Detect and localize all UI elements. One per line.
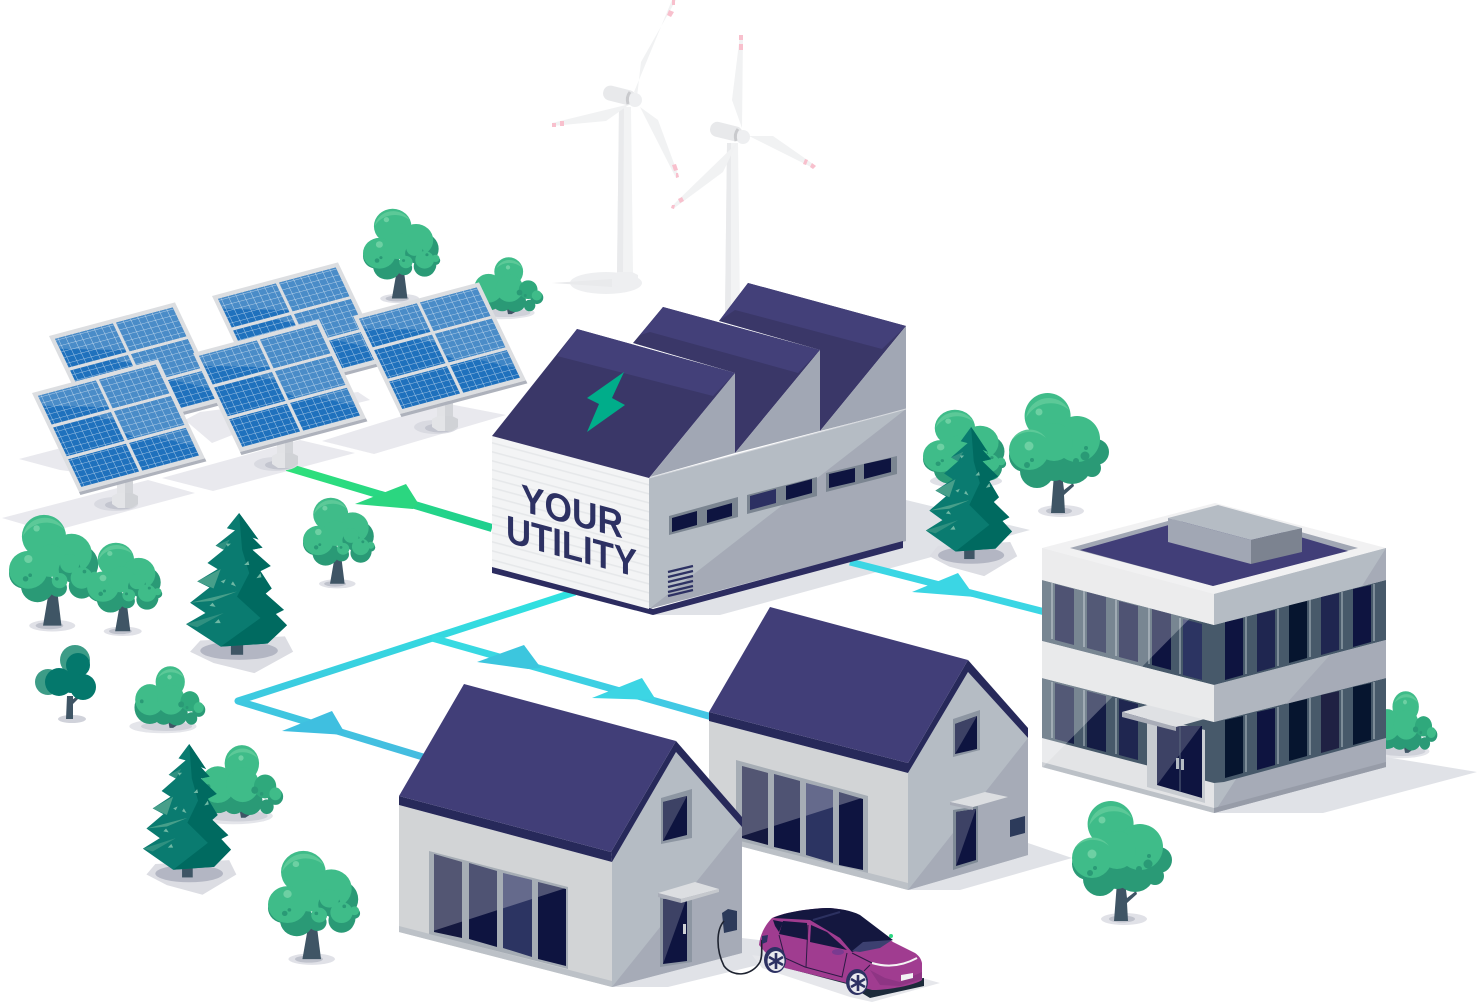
rooftop plant box xyxy=(1168,505,1302,564)
mid floor band right xyxy=(1214,640,1386,722)
icon: electric car xyxy=(752,908,940,1002)
panel shadow: factory ground shadow xyxy=(650,500,1030,615)
car roof xyxy=(773,908,893,952)
right wall xyxy=(649,409,906,609)
car front wheel xyxy=(846,969,868,995)
car bumper shade xyxy=(870,970,922,986)
car side windows xyxy=(773,920,847,950)
car body xyxy=(759,908,922,990)
tree: round tree bottom left xyxy=(268,851,360,965)
roof membrane xyxy=(1070,508,1358,586)
entrance canopy xyxy=(1122,703,1208,731)
mid floor band left xyxy=(1042,641,1214,722)
rear house plinth xyxy=(709,832,908,890)
car windscreen sheen xyxy=(852,940,892,952)
tree: round tree near pipe xyxy=(303,498,375,588)
car contact shadow xyxy=(775,958,924,998)
panel: rear house xyxy=(709,607,1028,890)
icon: green mirror tip xyxy=(889,934,893,938)
front roof xyxy=(492,329,735,478)
tree: pine left large xyxy=(186,513,293,673)
vent louvres xyxy=(668,566,693,596)
arrow: cyan branch arrow two xyxy=(592,678,656,700)
mid floor band shade xyxy=(1286,640,1386,704)
front house side wall xyxy=(612,752,742,987)
base strips xyxy=(1042,762,1386,813)
tree: bush left xyxy=(129,666,205,733)
panel shadow: front house ground shadow xyxy=(612,938,800,987)
icon: ev charger with cable xyxy=(718,909,768,974)
front house gable window xyxy=(661,789,692,844)
panel: front house xyxy=(399,684,742,987)
rear house gable window xyxy=(953,710,980,757)
third roof xyxy=(719,283,906,431)
front house glazing xyxy=(429,850,568,969)
icon: wind turbine left xyxy=(552,0,679,294)
right wall xyxy=(1214,548,1386,813)
tree: top round tree xyxy=(363,209,440,303)
rear house meter box xyxy=(1010,816,1025,837)
car ground shadow xyxy=(752,955,940,1002)
tree: round tree far left xyxy=(9,515,100,631)
car head light xyxy=(872,958,917,966)
rear house glazing xyxy=(736,760,868,873)
car number plate xyxy=(901,973,913,981)
icon: solar stands xyxy=(94,401,458,511)
tree: pine right xyxy=(926,427,1017,576)
arrow: cyan office arrow xyxy=(912,573,975,597)
panel: solar array right xyxy=(353,282,527,417)
car rear wheel xyxy=(764,947,786,973)
front house door xyxy=(660,897,692,967)
tree: bush lower left xyxy=(194,745,283,824)
panel: solar array back left xyxy=(49,302,223,438)
panel: solar array front left xyxy=(32,359,206,495)
parapet top xyxy=(1042,503,1386,594)
parapet right xyxy=(1214,548,1386,625)
left wall xyxy=(1042,548,1214,813)
front house front wall xyxy=(399,805,612,987)
tree: large round tree right xyxy=(1009,393,1109,517)
rear house side wall xyxy=(908,672,1028,890)
tree: top bush behind panels xyxy=(468,257,543,319)
second roof xyxy=(633,307,820,453)
pipe: green solar feed with arrow xyxy=(287,467,492,528)
tree: bush behind office xyxy=(1369,691,1437,758)
rear house door xyxy=(953,806,978,870)
rear house roof xyxy=(709,607,1028,773)
icon: lightning bolt xyxy=(587,372,625,432)
window bands xyxy=(1042,580,1386,783)
car mirror xyxy=(832,949,844,955)
arrow: cyan branch arrow one xyxy=(477,645,541,669)
front house roof xyxy=(399,684,742,862)
tree: round tree left xyxy=(87,543,162,636)
arrow: cyan lower arrow xyxy=(282,711,346,735)
icon: wind turbine right xyxy=(671,35,816,312)
right wall panes xyxy=(1225,585,1371,778)
car roof sheen xyxy=(813,912,840,920)
tree: round tree behind pine right xyxy=(923,410,1006,488)
sign: your utility xyxy=(506,477,637,586)
panel shadow: rear house ground shadow xyxy=(908,843,1072,890)
tree: round tree near house xyxy=(1072,801,1172,925)
factory windows xyxy=(669,456,897,535)
front house canopy xyxy=(658,882,719,903)
parapet left xyxy=(1042,548,1214,625)
tree: small dark tree xyxy=(35,645,96,723)
window mullions xyxy=(1052,583,1374,772)
pipe: cyan distribution lines xyxy=(238,562,1045,757)
front house plinth xyxy=(399,926,612,987)
front wall xyxy=(492,436,649,609)
factory base strip xyxy=(492,541,903,615)
panel: factory building xyxy=(492,283,906,615)
panel: office building xyxy=(1042,503,1386,813)
parapet right shade xyxy=(1362,548,1386,586)
panel shadow: office ground shadow xyxy=(1214,757,1477,813)
glass sheen xyxy=(1042,548,1214,768)
car door lines xyxy=(779,925,872,977)
sign: your utility: UTILITY xyxy=(506,508,637,586)
entrance door xyxy=(1147,716,1205,803)
panel: solar array centre xyxy=(193,319,367,455)
rear house canopy xyxy=(950,792,1008,810)
sign: your utility: YOUR xyxy=(521,477,623,547)
panel: solar array back middle xyxy=(212,262,386,398)
tree: pine lower left xyxy=(143,744,236,895)
panel shadows: solar ground shadows xyxy=(2,392,506,532)
left wall panes xyxy=(1055,584,1202,760)
sawtooth gables xyxy=(650,326,906,477)
rear house front wall xyxy=(709,721,908,890)
